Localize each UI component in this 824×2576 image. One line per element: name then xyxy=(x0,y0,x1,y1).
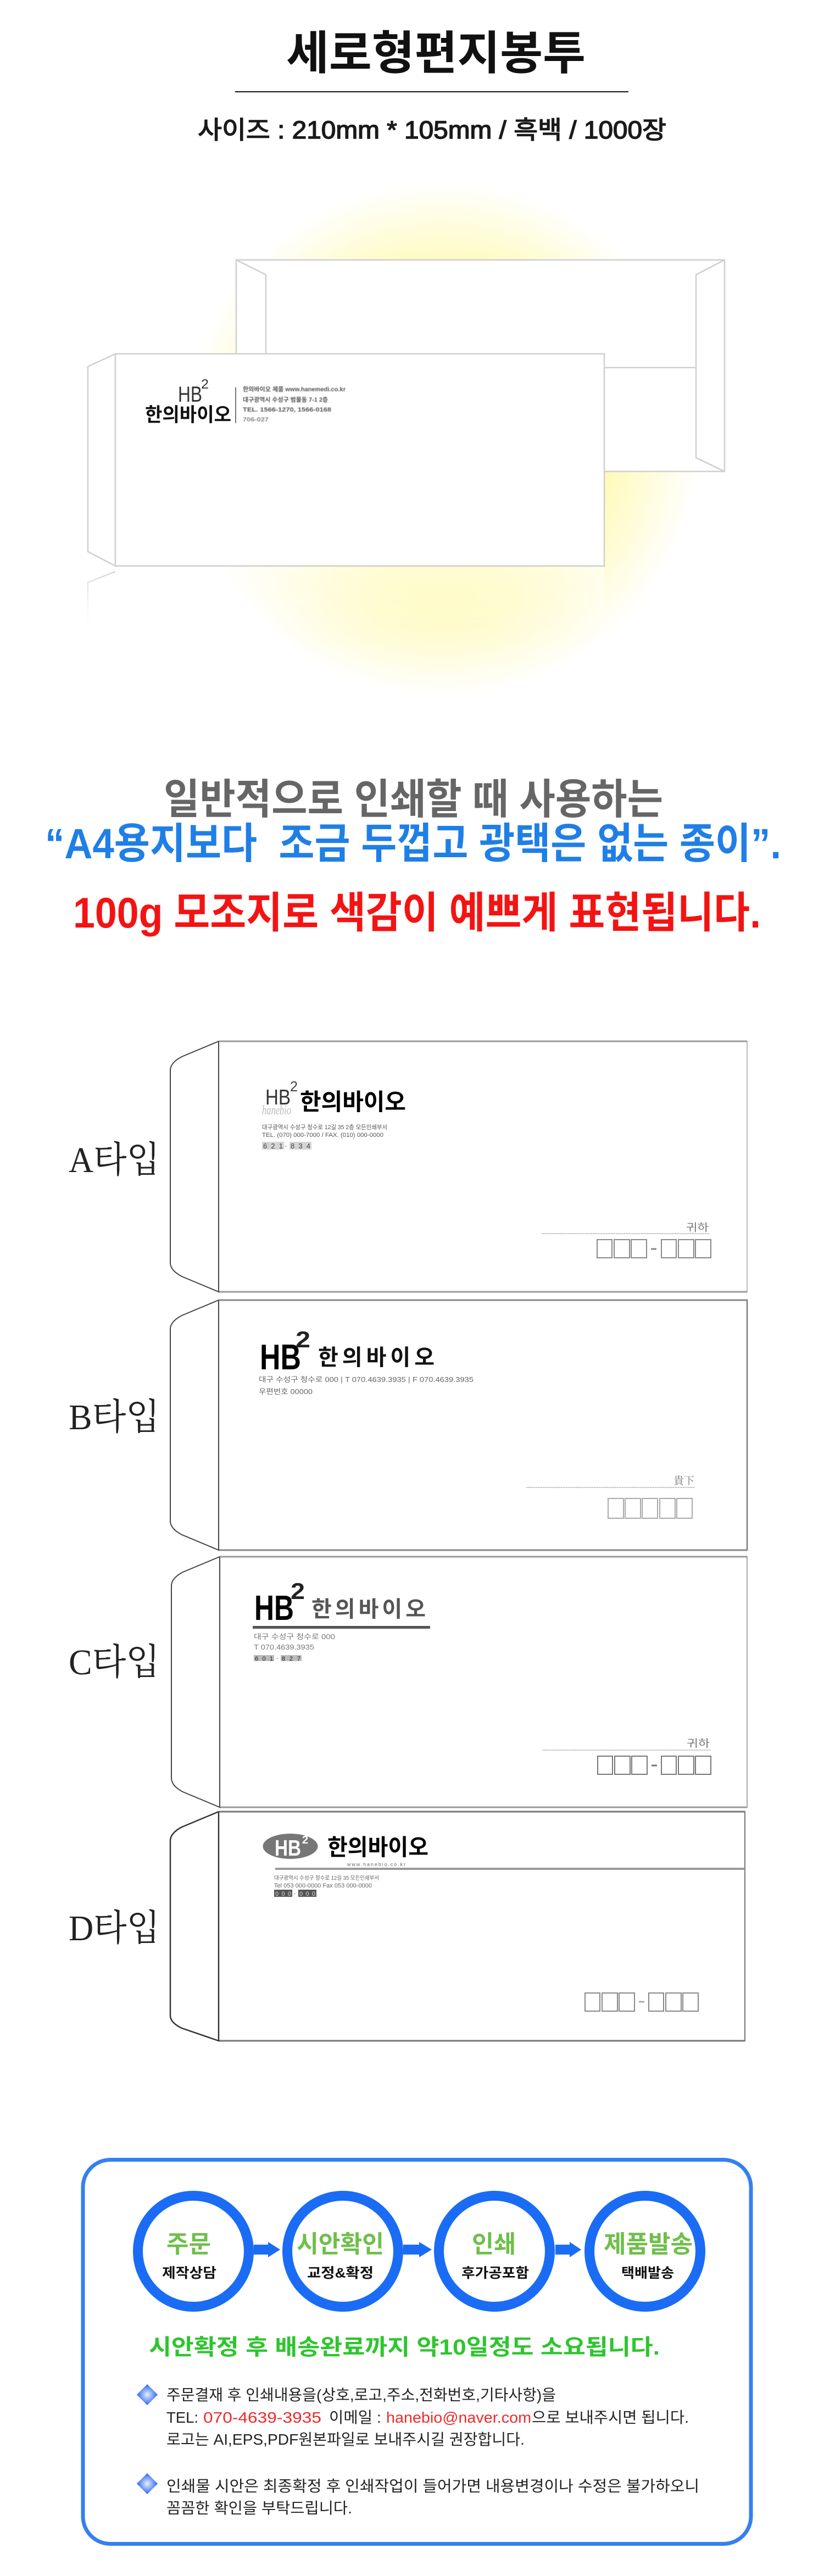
order instructions: 이메일 : xyxy=(329,2409,381,2426)
order instructions: 070-4639-3935 xyxy=(203,2409,321,2426)
address C: T 070.4639.3935 xyxy=(254,1643,314,1651)
logo D: 한의바이오 xyxy=(327,1835,428,1860)
address B xyxy=(259,1375,474,1396)
logo A: 2 xyxy=(290,1078,298,1095)
front envelope xyxy=(88,354,604,566)
recipient field A xyxy=(542,1222,711,1258)
sender postal code A: 834 xyxy=(291,1142,310,1150)
paper description: red line: 100g 모조지로 색감이 예쁘게 표현됩니다. xyxy=(73,889,761,937)
icon: bullet diamond 1 xyxy=(137,2384,158,2405)
address A: 대구광역시 수성구 청수로 12길 35 2층 모든인쇄부서 xyxy=(262,1124,387,1131)
logo C: 2 xyxy=(291,1578,305,1604)
step circle: shipping: 제품발송 xyxy=(604,2231,693,2258)
label: D type: D타입 xyxy=(69,1908,160,1948)
address D: Tel 053 000-0000 Fax 053 000-0000 xyxy=(274,1883,372,1889)
logo B: HB xyxy=(260,1337,301,1377)
illustration: envelopes with yellow glow xyxy=(88,181,725,698)
address B: 대구 수성구 청수로 000 | T 070.4639.3935 | F 070.4639.3935 xyxy=(259,1375,474,1384)
address D: 대구광역시 수성구 청수로 12길 35 모든인쇄부서 xyxy=(274,1874,379,1881)
front envelope address: TEL. 1566-1270, 1566-0168 xyxy=(243,407,331,413)
logo A: hanebio xyxy=(262,1103,291,1118)
sender postal code A: - xyxy=(285,1143,287,1150)
sender postal code C: - xyxy=(276,1656,278,1662)
step circle: order xyxy=(138,2196,249,2307)
recipient field A: 귀하 xyxy=(686,1222,709,1234)
arrow 2 xyxy=(403,2242,432,2257)
front envelope address: 대구광역시 수성구 범물동 7-1 2층 xyxy=(243,396,328,403)
step circle: order: 주문 xyxy=(166,2231,211,2258)
recipient field C xyxy=(542,1737,711,1774)
logo A xyxy=(262,1078,406,1118)
front envelope address: 한의바이오 제품 www.hanemedi.co.kr xyxy=(243,385,346,393)
label: B type: B타입 xyxy=(69,1397,160,1437)
subtitle: size and spec: 사이즈 : 210mm * 105mm / 흑백 / 1000장 xyxy=(198,116,666,144)
step circle: shipping: 택배발송 xyxy=(621,2266,674,2281)
logo B: 한의바이오 xyxy=(318,1346,435,1370)
front envelope logo: 한의바이오 xyxy=(145,404,231,426)
front envelope address xyxy=(243,385,346,423)
recipient field B: 貴下 xyxy=(673,1475,694,1487)
sender postal code D: - xyxy=(294,1891,296,1897)
logo C: 한의바이오 xyxy=(311,1597,426,1622)
lead time notice: 시안확정 후 배송완료까지 약10일정도 소요됩니다. xyxy=(149,2335,660,2360)
recipient postal boxes D xyxy=(585,1993,698,2011)
order instructions: TEL: xyxy=(166,2409,198,2426)
step circle: printing: 후가공포함 xyxy=(461,2266,529,2281)
address C xyxy=(254,1633,335,1651)
front envelope address: 706-027 xyxy=(243,417,269,423)
envelope D xyxy=(170,1812,745,2041)
logo B: 2 xyxy=(296,1326,310,1352)
address A: TEL. (070) 000-7000 / FAX. (010) 000-0000 xyxy=(262,1132,383,1139)
paper description: blue line: “A4용지보다 조금 두껍고 광택은 없는 종이”. xyxy=(45,820,781,868)
recipient field C: 귀하 xyxy=(687,1737,710,1750)
front envelope logo xyxy=(145,377,236,426)
address C: 대구 수성구 청수로 000 xyxy=(254,1633,335,1641)
front envelope logo: 2 xyxy=(201,377,209,392)
sender postal code C xyxy=(254,1655,302,1662)
envelope reflection xyxy=(88,567,604,639)
step circle: printing xyxy=(439,2196,550,2307)
logo B xyxy=(260,1326,435,1377)
title: 세로형편지봉투 xyxy=(286,27,586,79)
envelope B xyxy=(170,1300,747,1550)
step circle: proof check: 시안확인 xyxy=(297,2231,384,2258)
order instructions: 로고는 AI,EPS,PDF원본파일로 보내주시길 권장합니다. xyxy=(166,2431,525,2448)
sender postal code A xyxy=(262,1142,311,1150)
envelope outline xyxy=(170,1041,747,1292)
panel: order process xyxy=(83,2159,751,2544)
logo D xyxy=(263,1834,745,1870)
front envelope logo: HB xyxy=(178,382,202,407)
sender postal code C: 827 xyxy=(282,1656,300,1662)
logo D: www.hanebio.co.kr xyxy=(347,1862,405,1867)
step circle: order: 제작상담 xyxy=(162,2266,216,2281)
envelope outline xyxy=(170,1300,747,1550)
address D xyxy=(274,1874,379,1889)
label: C type: C타입 xyxy=(69,1642,160,1683)
sender postal code C: 601 xyxy=(255,1656,273,1662)
envelope outline xyxy=(171,1557,747,1807)
back envelope xyxy=(236,260,725,471)
step circle: proof check: 교정&확정 xyxy=(307,2266,374,2281)
sender postal code A: 621 xyxy=(263,1142,283,1150)
arrow 1 xyxy=(254,2242,280,2257)
proof confirmation notice xyxy=(166,2478,699,2517)
envelope C xyxy=(171,1557,747,1807)
paper description: grey line: 일반적으로 인쇄할 때 사용하는 xyxy=(164,776,663,823)
order instructions xyxy=(166,2386,689,2448)
sender postal code D: 000 xyxy=(275,1891,291,1897)
step circle: shipping xyxy=(589,2196,700,2307)
order instructions: 으로 보내주시면 됩니다. xyxy=(532,2409,689,2426)
sender postal code D xyxy=(274,1890,316,1897)
logo C xyxy=(253,1578,430,1629)
step circle: printing: 인쇄 xyxy=(472,2231,516,2258)
address B: 우편번호 00000 xyxy=(259,1387,313,1396)
recipient field B xyxy=(526,1475,695,1518)
logo D: 2 xyxy=(302,1834,308,1846)
address A xyxy=(262,1124,387,1139)
proof confirmation notice: 인쇄물 시안은 최종확정 후 인쇄작업이 들어가면 내용변경이나 수정은 불가하오니 xyxy=(166,2478,699,2495)
logo A: HB xyxy=(265,1086,291,1109)
proof confirmation notice: 꼼꼼한 확인을 부탁드립니다. xyxy=(166,2500,352,2517)
logo A: 한의바이오 xyxy=(300,1089,406,1115)
label: A type: A타입 xyxy=(69,1140,160,1180)
sender postal code D: 000 xyxy=(299,1891,315,1897)
logo C: HB xyxy=(254,1588,294,1628)
envelope outline xyxy=(170,1812,745,2041)
icon: bullet diamond 2 xyxy=(137,2473,158,2494)
step circle: proof check xyxy=(287,2196,398,2307)
envelope A xyxy=(170,1041,747,1292)
order instructions: 주문결재 후 인쇄내용을(상호,로고,주소,전화번호,기타사항)을 xyxy=(166,2386,556,2403)
arrow 3 xyxy=(555,2242,581,2257)
logo D: HB xyxy=(275,1835,301,1861)
order instructions: hanebio@naver.com xyxy=(386,2409,531,2426)
